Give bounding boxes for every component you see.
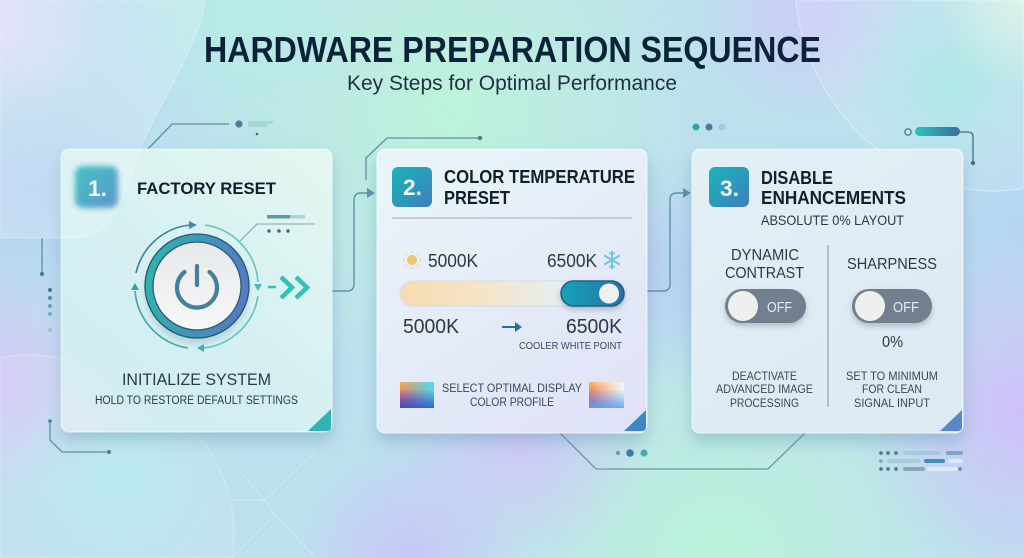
- toggle: sharpness off: [852, 289, 932, 323]
- label: sharpness value: 0%: [882, 334, 903, 351]
- description: dynamic contrast: [716, 369, 813, 410]
- step badge one: [75, 166, 118, 208]
- decorative callout line: card one: [240, 215, 315, 241]
- title: HARDWARE PREPARATION SEQUENCE: [204, 29, 821, 70]
- connector: above card two: [366, 136, 482, 180]
- label: select optimal display color profile: [442, 383, 582, 409]
- label: select optimal display color profile: COLOR PROFILE: [470, 397, 554, 409]
- description: sharpness: [846, 369, 938, 410]
- divider: [392, 217, 632, 219]
- subheading: absolute 0% layout: ABSOLUTE 0% LAYOUT: [761, 212, 904, 228]
- frosted blob over card corner: [0, 0, 205, 238]
- toggle: sharpness off: OFF: [893, 299, 919, 316]
- label: select optimal display color profile: SELECT OPTIMAL DISPLAY: [442, 383, 582, 395]
- heading: disable enhancements: [761, 168, 906, 208]
- arrow: temperature direction: [502, 322, 522, 332]
- label: initialize system: INITIALIZE SYSTEM: [122, 370, 271, 389]
- heading: color temperature preset: [444, 167, 635, 208]
- label: dynamic contrast: DYNAMIC: [731, 247, 799, 264]
- description: dynamic contrast: DEACTIVATE: [732, 369, 797, 383]
- decorative pill connector: top right: [905, 127, 975, 165]
- subtitle: Key Steps for Optimal Performance: [347, 72, 677, 95]
- description: sharpness: SIGNAL INPUT: [854, 396, 931, 410]
- label: 6500K bottom: 6500K: [566, 316, 623, 338]
- heading: disable enhancements: DISABLE: [761, 168, 833, 188]
- step badge two: [392, 167, 432, 207]
- label: cooler white point: COOLER WHITE POINT: [519, 341, 622, 352]
- label: sharpness: SHARPNESS: [847, 256, 937, 273]
- connector: left line with dots: [40, 238, 52, 332]
- icon: snowflake: [604, 251, 620, 269]
- badge number one: 1.: [88, 176, 107, 201]
- arrow: card one to card two: [332, 188, 375, 291]
- label: 5000K bottom: 5000K: [403, 316, 460, 338]
- icon: sun: [403, 251, 421, 269]
- label: hold to restore: HOLD TO RESTORE DEFAULT SETTINGS: [95, 395, 298, 407]
- panel: factory reset: [0, 0, 332, 432]
- heading: factory reset: FACTORY RESET: [137, 179, 277, 198]
- decorative blob: top right: [796, 0, 1024, 191]
- swatch: right color profile: [589, 382, 624, 408]
- icon: power button with cycle arrows: [131, 221, 262, 352]
- toggle: dynamic contrast off: OFF: [767, 299, 792, 316]
- description: dynamic contrast: ADVANCED IMAGE: [716, 382, 813, 396]
- label: dynamic contrast: [725, 247, 804, 282]
- icon: forward chevrons: [268, 277, 307, 298]
- decorative data bars: bottom right: [879, 451, 963, 471]
- connector: lower left: [48, 419, 111, 454]
- toggle: dynamic contrast off: [725, 289, 806, 323]
- decorative crystal lines: [232, 452, 316, 558]
- label: dynamic contrast: CONTRAST: [725, 265, 804, 282]
- swatch: left color profile: [400, 382, 434, 408]
- label: 6500K top: 6500K: [547, 251, 597, 271]
- panel: color temperature preset: [377, 149, 647, 433]
- heading: color temperature preset: PRESET: [444, 188, 510, 208]
- corner accent: card two: [624, 410, 646, 431]
- label: 5000K top: 5000K: [428, 251, 478, 271]
- corner accent: card one: [308, 409, 331, 431]
- connector: bottom bracket: [560, 433, 805, 469]
- heading: color temperature preset: COLOR TEMPERATURE: [444, 167, 635, 187]
- heading: disable enhancements: ENHANCEMENTS: [761, 188, 906, 208]
- panel: disable enhancements: [692, 149, 963, 433]
- description: dynamic contrast: PROCESSING: [730, 396, 799, 410]
- corner accent: card three: [940, 410, 962, 431]
- description: sharpness: FOR CLEAN: [862, 382, 922, 396]
- divider: [827, 245, 829, 407]
- connector: top left circuit: [148, 120, 273, 149]
- step badge two: 2.: [403, 175, 422, 200]
- slider: color temperature: [400, 281, 624, 306]
- arrow: card two to card three: [647, 188, 691, 291]
- decorative dots: top of card three: [692, 124, 726, 130]
- step badge three: [709, 167, 749, 207]
- step badge three: 3.: [720, 176, 739, 201]
- decorative blob: bottom left: [0, 355, 234, 558]
- description: sharpness: SET TO MINIMUM: [846, 369, 938, 383]
